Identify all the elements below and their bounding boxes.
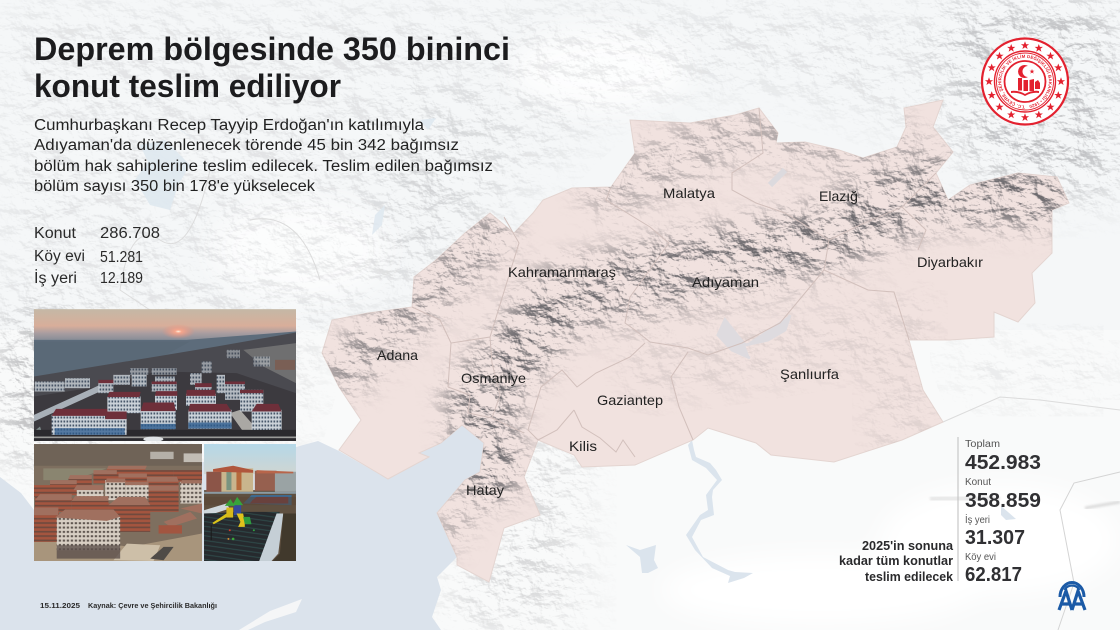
soft white patches	[210, 30, 1120, 625]
province labels: Elazığ	[819, 188, 858, 204]
region relief	[322, 108, 1068, 560]
map: earthquake region	[322, 100, 1070, 582]
divider	[958, 437, 959, 581]
province labels: Malatya	[663, 185, 715, 201]
island tip	[239, 599, 302, 630]
photo: playground	[204, 444, 296, 561]
totals panel: Toplam	[965, 439, 1000, 450]
title: Deprem bölgesinde 350 bininci	[34, 31, 510, 67]
province labels: Şanlıurfa	[780, 366, 839, 382]
delivered stats	[34, 225, 160, 287]
region fill	[322, 100, 1069, 582]
logo: ministry seal	[980, 37, 1070, 126]
totals panel: Köy evi	[965, 552, 996, 563]
province labels: Osmaniye	[461, 370, 526, 386]
logo: AA	[1059, 582, 1085, 610]
regional and state boundaries	[120, 170, 1120, 630]
province labels: Adıyaman	[692, 274, 759, 290]
syria reservoir and river	[686, 440, 753, 583]
totals panel: 358.859	[965, 490, 1041, 512]
province labels: Gaziantep	[597, 392, 663, 408]
delivered stats: 286.708	[100, 225, 160, 242]
intro text: Adıyaman'da düzenlenecek törende 45 bin 342 bağımsız	[34, 137, 459, 154]
upper-left lakes	[135, 108, 436, 235]
summary caption	[839, 539, 954, 584]
seal emblem	[1011, 65, 1040, 96]
intro text: bölüm sayısı 350 bin 178'e yükselecek	[34, 178, 315, 195]
delivered stats: 51.281	[100, 249, 143, 266]
delivered stats: Köy evi	[34, 248, 85, 265]
title	[34, 31, 510, 104]
totals panel: 452.983	[965, 452, 1041, 474]
province borders	[412, 108, 936, 457]
totals panel: İş yeri	[965, 513, 990, 526]
delivered stats: Konut	[34, 225, 77, 242]
totals panel: Konut	[965, 477, 991, 488]
intro text: bölüm hak sahiplerine teslim edilecek. Teslim edilen bağımsız	[34, 158, 493, 175]
province labels: Kilis	[569, 438, 597, 454]
province labels: Diyarbakır	[917, 254, 983, 270]
totals panel: 62.817	[965, 564, 1022, 586]
summary caption: teslim edilecek	[865, 570, 953, 584]
sea	[0, 425, 484, 630]
photo: aerial housing at sunset	[34, 309, 296, 442]
province labels	[377, 185, 983, 498]
delivered stats: 12.189	[100, 270, 143, 287]
intro text: Cumhurbaşkanı Recep Tayyip Erdoğan'ın katılımıyla	[34, 117, 424, 134]
footer: date and source: 15.11.2025	[40, 601, 80, 610]
photo: brick apartment blocks	[34, 444, 202, 561]
province labels: Adana	[377, 347, 418, 363]
logo: ministry seal: T.C. ÇEVRE, ŞEHİRCİLİK VE İKLİM DEĞİŞİKLİĞİ BAKANLIĞI • 1920	[998, 54, 1052, 108]
province labels: Kahramanmaraş	[508, 264, 616, 280]
totals panel: 31.307	[965, 527, 1025, 549]
intro text	[34, 117, 493, 195]
footer: date and source: Kaynak: Çevre ve Şehircilik Bakanlığı	[88, 601, 217, 610]
summary caption: kadar tüm konutlar	[839, 554, 953, 568]
totals panel	[965, 439, 1041, 586]
province labels: Hatay	[466, 482, 504, 498]
summary caption: 2025'in sonuna	[862, 539, 954, 553]
seal stars	[985, 41, 1065, 121]
delivered stats: İş yeri	[34, 269, 77, 287]
title: konut teslim ediliyor	[34, 68, 341, 104]
